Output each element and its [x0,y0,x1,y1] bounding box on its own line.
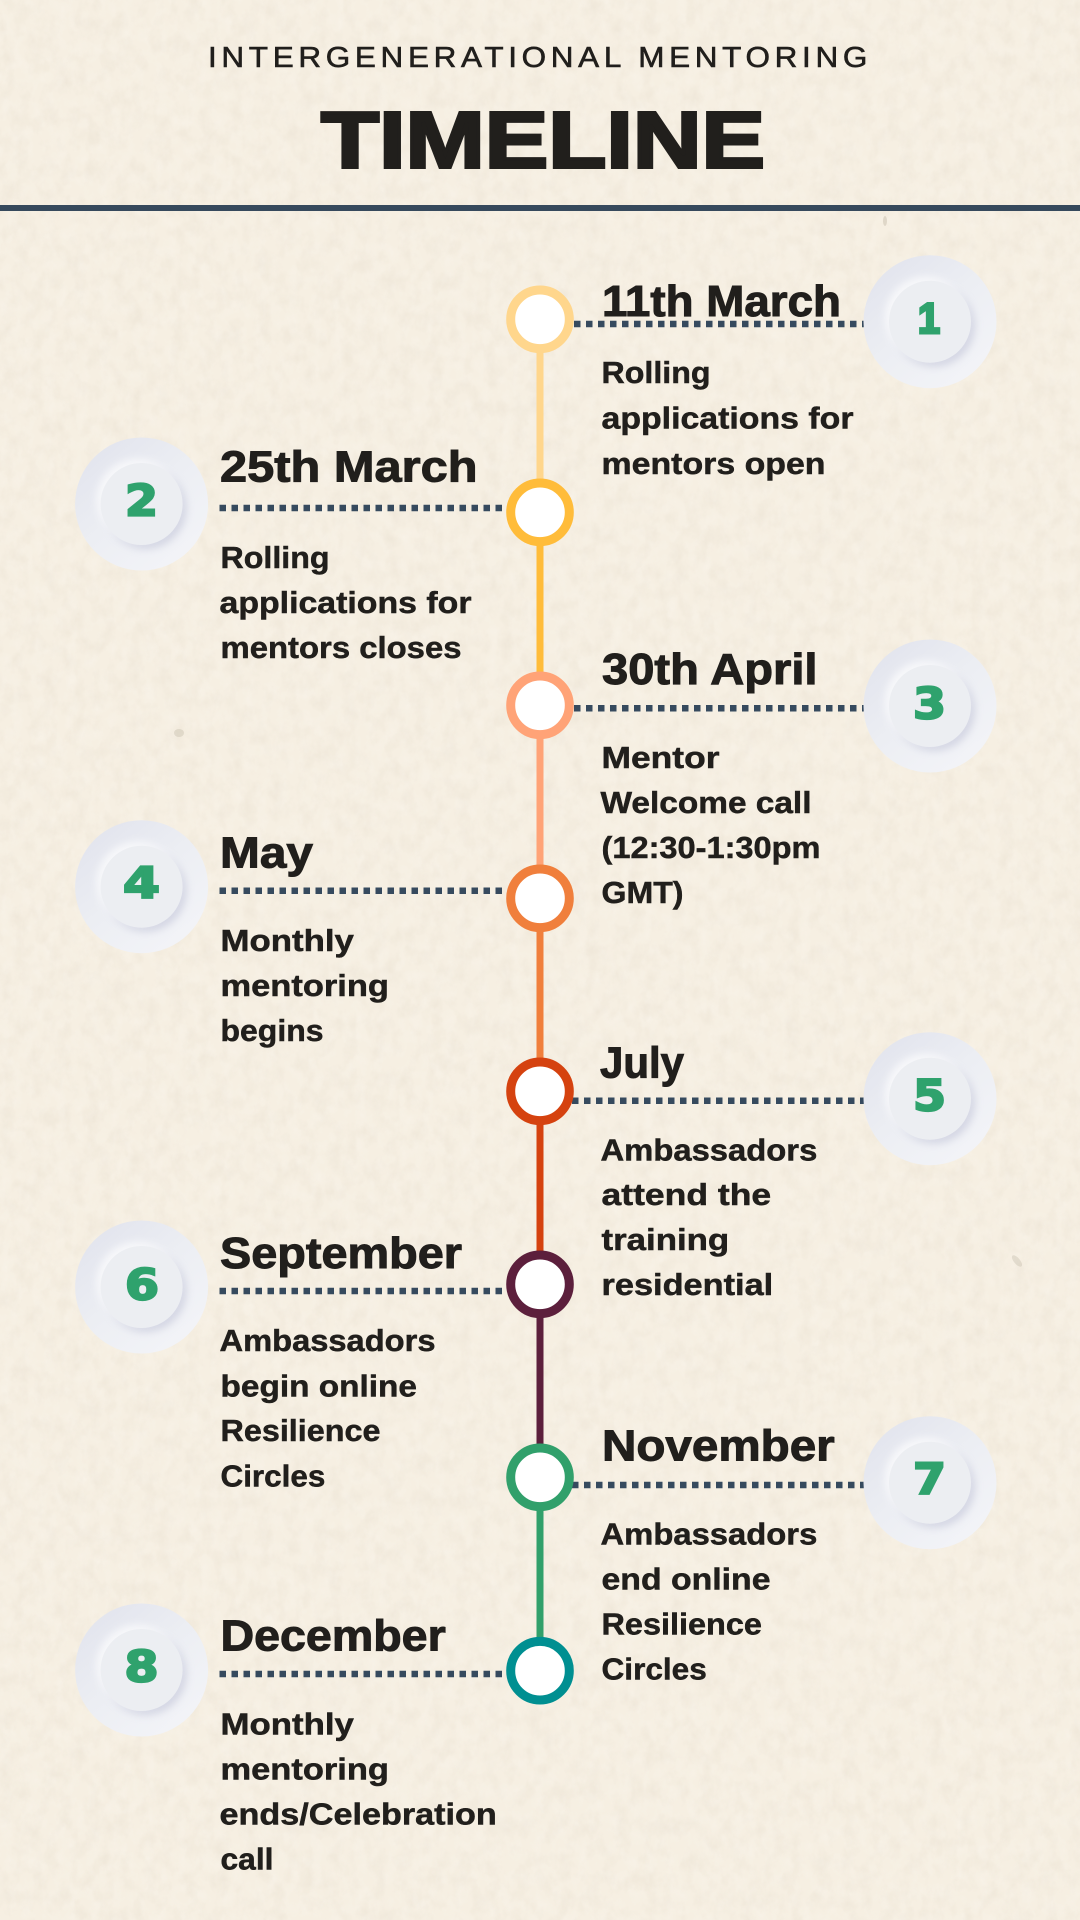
dotted leader 1 [574,321,866,327]
description 3: Welcome call [600,785,812,820]
connector 4 to 5 [536,898,544,1091]
description 3 [600,740,820,910]
date heading 8: December [220,1612,446,1661]
number badge 3 [864,640,996,772]
node 1 [511,290,569,349]
connector 5 to 6 [536,1091,544,1284]
step 8: December [75,1604,569,1876]
date heading 1: 11th March [602,277,841,326]
date heading 6: September [220,1229,462,1278]
connector 2 to 3 [536,512,544,705]
node 6 [511,1255,569,1314]
connector 3 to 4 [536,705,544,898]
dotted leader 3 [574,705,866,712]
node 2 [511,483,569,542]
description 3: Mentor [602,740,720,775]
number badge 7: 7 [913,1455,946,1505]
connector 6 to 7 [536,1284,544,1477]
description 6: begin online [220,1368,417,1404]
date heading 4: May [220,828,314,877]
step 6: September [75,1220,569,1494]
description 8: Monthly [220,1706,355,1742]
node 4 [511,869,569,928]
description 4: Monthly [220,923,355,958]
date heading 7: November [602,1422,835,1471]
step 7: November [511,1416,996,1686]
number badge 3: 3 [913,679,946,729]
description 6 [220,1323,436,1494]
description 1: mentors open [602,446,826,481]
step 4: May [75,820,569,1091]
description 1: applications for [602,400,854,436]
description 8: mentoring [220,1752,389,1786]
description 8: ends/Celebration [220,1796,497,1832]
description 4: mentoring [220,968,389,1003]
step 5: July [511,1032,996,1302]
description 7: Resilience [602,1606,762,1642]
number badge 6: 6 [125,1261,159,1311]
header divider [0,205,1080,211]
number badge 5: 5 [913,1072,946,1122]
node 3 [511,676,569,735]
date heading 2: 25th March [220,443,478,492]
description 7 [600,1516,817,1686]
description 4 [220,923,389,1048]
description 5: residential [602,1267,773,1302]
number badge 4 [75,820,208,953]
dotted leader 8 [220,1671,502,1677]
date heading 5: July [600,1038,685,1087]
description 3: GMT) [602,875,684,910]
step 2: 25th March [75,438,569,705]
description 2: mentors closes [220,630,462,665]
dotted leader 7 [572,1482,866,1488]
dotted leader 5 [572,1097,866,1104]
description 8 [220,1706,497,1876]
description 2 [220,540,472,665]
step 1: 11th March [511,255,996,512]
description 3: (12:30-1:30pm [602,830,820,865]
step 3: 30th April [511,640,996,910]
node 5 [511,1062,569,1121]
dotted leader 6 [220,1288,502,1294]
description 7: Circles [602,1652,707,1686]
description 5: training [602,1222,729,1257]
description 2: applications for [220,585,472,620]
number badge 2 [75,438,208,570]
dotted leader 2 [220,505,502,511]
number badge 1: 1 [918,295,940,343]
description 7: end online [602,1562,770,1596]
eyebrow heading: INTERGENERATIONAL MENTORING [208,42,872,74]
connector 1 to 2 [536,319,544,512]
number badge 8 [75,1604,208,1736]
number badge 6 [75,1220,208,1354]
description 8: call [220,1842,274,1876]
dotted leader 4 [220,887,506,894]
description 1 [602,355,854,481]
node 8 [511,1641,569,1700]
connector 7 to 8 [536,1477,544,1670]
number badge 5 [864,1032,996,1165]
description 2: Rolling [220,540,330,575]
date heading 3: 30th April [602,645,818,694]
description 1: Rolling [602,355,710,390]
number badge 2: 2 [125,477,158,527]
title: TIMELINE [321,96,765,184]
description 5: attend the [602,1177,771,1212]
description 5: Ambassadors [600,1132,817,1168]
number badge 4: 4 [123,859,160,909]
number badge 1 [864,255,996,388]
description 6: Resilience [220,1413,380,1448]
description 7: Ambassadors [600,1516,817,1552]
description 6: Ambassadors [220,1323,436,1358]
description 6: Circles [220,1458,325,1494]
number badge 8: 8 [124,1643,158,1693]
description 5 [600,1132,817,1302]
description 4: begins [220,1013,324,1048]
number badge 7 [864,1416,996,1549]
node 7 [511,1448,569,1507]
